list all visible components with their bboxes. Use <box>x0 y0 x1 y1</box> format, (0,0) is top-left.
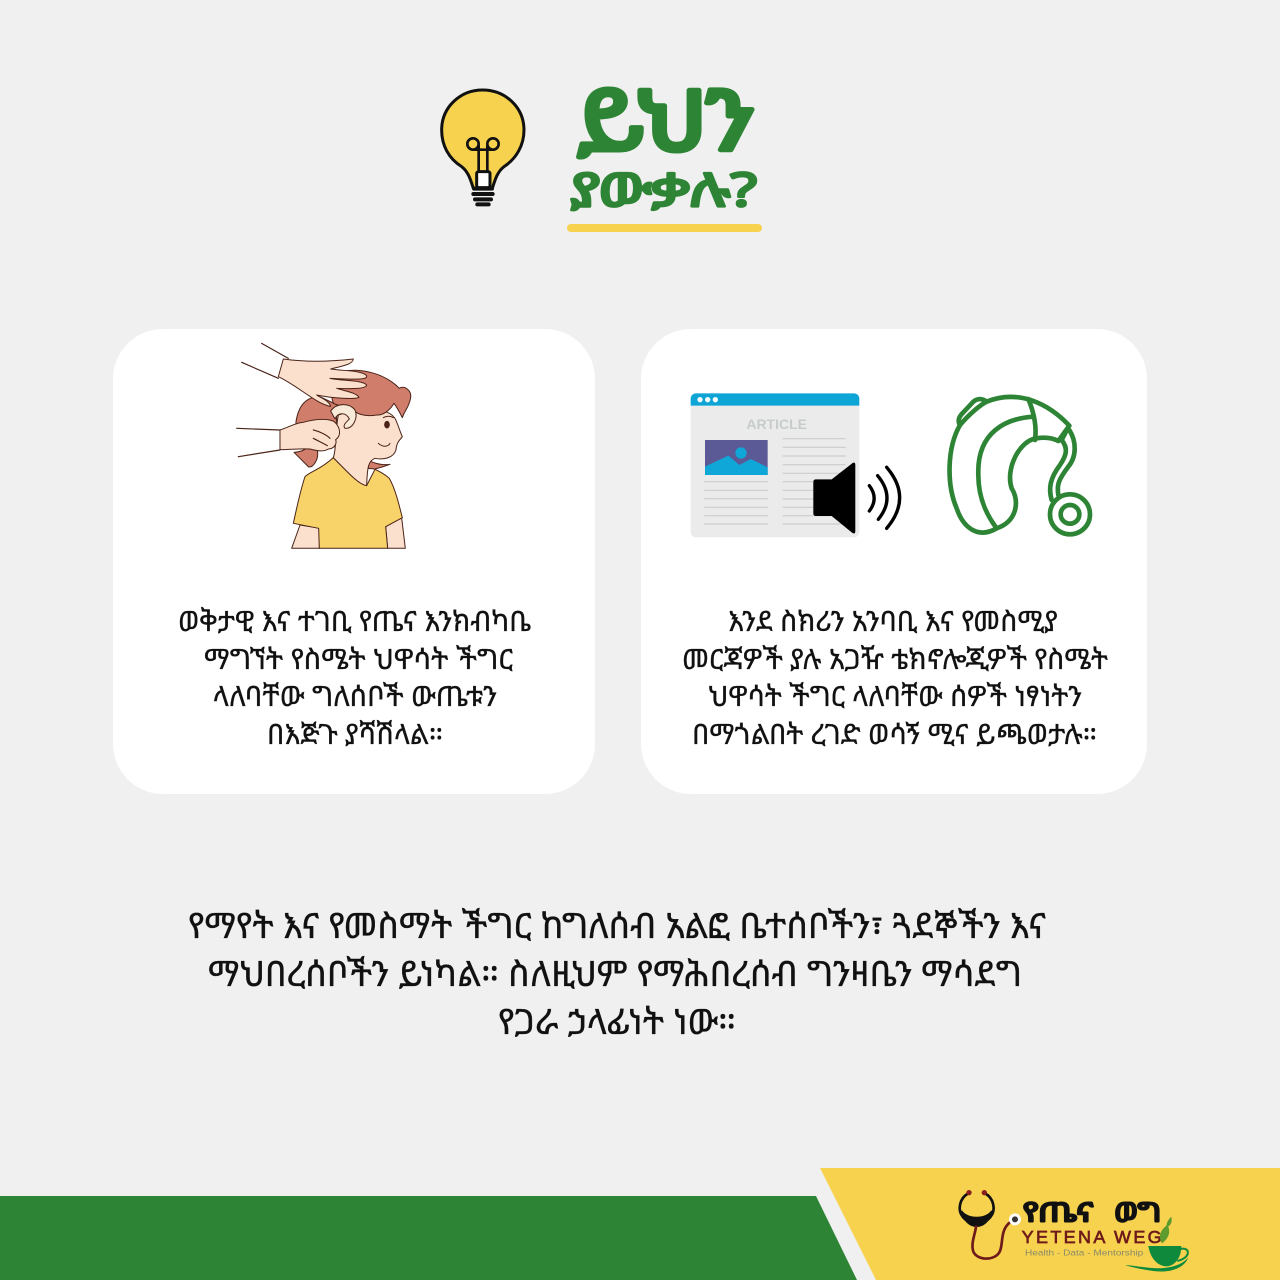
card background <box>641 329 1147 794</box>
illustration: article with speaker: ARTICLE <box>746 416 807 432</box>
panel: assistive technology <box>641 329 1147 794</box>
title line two: ያውቃሉ? <box>571 158 757 220</box>
panel: patient care <box>113 329 595 794</box>
icon: light bulb <box>442 90 524 204</box>
card text: ወቅታዊ እና ተገቢ የጤና እንክብካቤ <box>178 602 531 640</box>
illustration: hearing aid <box>950 397 1090 534</box>
card text <box>682 602 1108 753</box>
title underline <box>567 224 762 232</box>
card text: በማጎልበት ረገድ ወሳኝ ሚና ይጫወታሉ። <box>692 715 1097 753</box>
card text <box>178 602 531 753</box>
icon: tea cup <box>1125 1217 1188 1272</box>
footer green band <box>0 1196 857 1280</box>
title line one: ይህን <box>576 60 754 175</box>
card text: ማግኘት የስሜት ህዋሳት ችግር <box>204 640 513 678</box>
card text: ላለባቸው ግለሰቦች ውጤቱን <box>213 677 497 715</box>
logo tagline: Health - Data - Mentorship <box>1025 1247 1144 1257</box>
card text: መርጃዎች ያሉ አጋዥ ቴክኖሎጂዎች የስሜት <box>682 640 1108 678</box>
card text: እንደ ስክሪን አንባቢ እና የመስሚያ <box>728 602 1058 640</box>
logo Amharic wordmark: ወግ <box>1114 1194 1161 1230</box>
logo: Yetena Weg <box>960 1190 1188 1272</box>
card text: በእጅጉ ያሻሽላል። <box>267 715 443 753</box>
closing statement: የጋራ ኃላፊነት ነው። <box>498 998 736 1045</box>
closing statement: የማየት እና የመስማት ችግር ከግለሰብ አልፎ ቤተሰቦችን፣ ጓደኞችን እና <box>188 902 1046 949</box>
illustration: article with speaker <box>691 393 900 537</box>
logo Amharic wordmark <box>1023 1194 1161 1230</box>
logo Amharic wordmark: የጤና <box>1023 1194 1094 1230</box>
logo Latin wordmark: YETENA WEG <box>1022 1227 1162 1247</box>
illustration: child being fitted with hearing aid <box>237 343 411 548</box>
card text: ህዋሳት ችግር ላለባቸው ሰዎች ነፃነትን <box>708 677 1082 715</box>
closing statement: ማህበረሰቦችን ይነካል። ስለዚህም የማሕበረሰብ ግንዛቤን ማሳደግ <box>208 950 1022 997</box>
title <box>571 60 757 220</box>
footer yellow band <box>820 1168 1280 1280</box>
card background <box>113 329 595 794</box>
closing statement <box>188 902 1046 1045</box>
stethoscope <box>960 1190 1021 1259</box>
